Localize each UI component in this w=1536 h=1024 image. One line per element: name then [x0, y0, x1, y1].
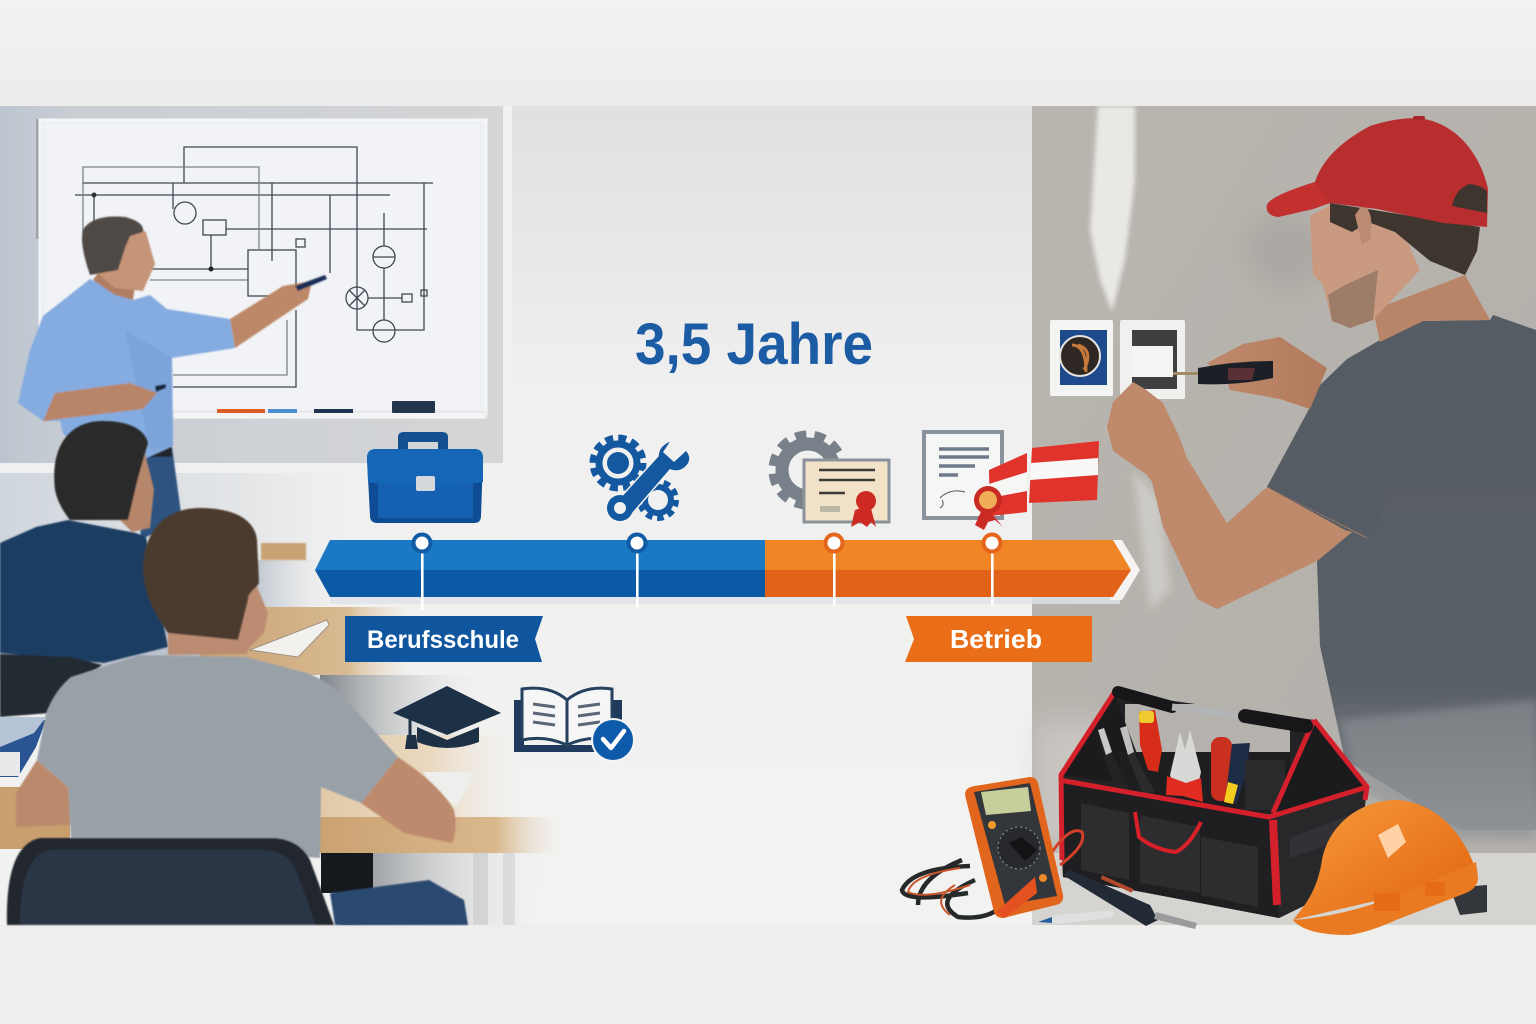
worker — [1107, 116, 1536, 840]
tools in the bag — [1098, 710, 1285, 810]
panel: classroom scene — [0, 106, 562, 925]
flag small — [989, 453, 1027, 516]
desks — [0, 607, 562, 925]
icon: gear and wrench — [593, 438, 690, 521]
outlets — [1050, 320, 1185, 399]
teacher — [18, 216, 327, 540]
notebook — [250, 620, 329, 657]
milestones — [412, 532, 1002, 610]
label: Berufsschule — [345, 616, 543, 662]
bag red piping — [1059, 693, 1367, 860]
jeans — [140, 447, 182, 540]
rosette — [975, 505, 1003, 530]
classroom wall — [0, 106, 550, 925]
pointing arm — [230, 281, 312, 348]
red cap — [1267, 116, 1488, 227]
panel: tool set — [902, 692, 1487, 935]
icon: gear with certificate — [773, 435, 889, 527]
whiteboard — [36, 119, 486, 419]
neck and head — [93, 270, 135, 300]
tool bag — [1050, 692, 1367, 918]
panel: right wall — [1032, 106, 1536, 925]
circuit diagram — [75, 147, 433, 387]
check badge — [592, 719, 634, 761]
student front row — [7, 508, 468, 925]
icon: briefcase — [367, 432, 483, 523]
sleeve — [1267, 400, 1385, 540]
t-shirt body — [1267, 315, 1536, 830]
right hand and screwdriver — [1173, 337, 1327, 409]
icon: open book with check — [514, 688, 634, 761]
pen — [1038, 910, 1114, 924]
soldering iron — [1063, 870, 1197, 929]
bag handle — [1118, 692, 1172, 707]
icon: document with Austrian flag — [924, 432, 1099, 530]
label: Berufsschule: Berufsschule — [367, 626, 519, 654]
marker tray — [173, 412, 486, 419]
bag front panels — [1059, 780, 1279, 918]
books — [0, 717, 46, 777]
flag large — [1029, 441, 1099, 503]
hard hat — [1293, 800, 1487, 935]
label: Betrieb — [905, 616, 1092, 662]
label: Betrieb: Betrieb — [950, 624, 1042, 654]
student back row — [0, 421, 306, 717]
left arm — [1107, 382, 1372, 609]
title: 3,5 Jahre — [635, 312, 873, 377]
bag pocket handle — [1135, 812, 1201, 852]
timeline bar — [315, 532, 1140, 610]
worksheet — [423, 772, 475, 807]
lower arm — [43, 383, 157, 421]
multimeter — [965, 777, 1063, 918]
chair — [7, 838, 334, 925]
icon: graduation cap — [393, 686, 501, 749]
multimeter cables — [902, 860, 1000, 918]
neck and face — [1310, 203, 1490, 342]
shirt — [18, 279, 235, 470]
